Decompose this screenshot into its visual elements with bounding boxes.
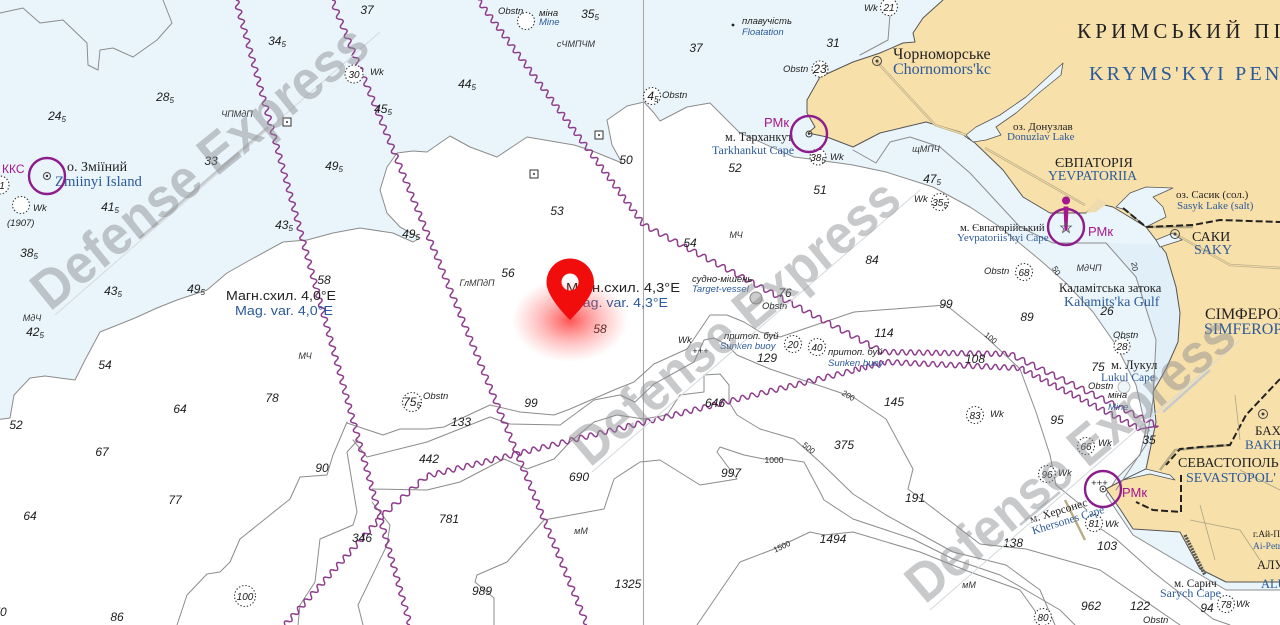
purple radar circle markers: +++	[1091, 478, 1108, 489]
depth soundings: 90	[315, 461, 329, 475]
depth soundings: 76	[778, 286, 792, 300]
depth soundings: 89	[1020, 310, 1034, 324]
depth soundings: 52	[9, 418, 23, 432]
place names: о. Зміїний	[67, 160, 128, 175]
depth soundings: 5	[39, 331, 44, 340]
place names: SAKY	[1194, 243, 1232, 258]
depth soundings: 28	[156, 90, 169, 104]
depth soundings: 35	[581, 7, 594, 21]
dotted obstruction and wreck markers: 35	[932, 198, 943, 209]
place names: Khersones Cape	[1031, 504, 1106, 537]
red location pin	[546, 258, 594, 320]
depth soundings: 50	[619, 153, 633, 167]
seabed type labels: ЧПМдП	[221, 109, 253, 119]
dotted obstruction and wreck markers: Wk	[1098, 438, 1113, 449]
dotted obstruction and wreck markers: 68	[1018, 268, 1030, 279]
depth soundings: 95	[1050, 413, 1064, 427]
dotted obstruction and wreck markers: 28	[1115, 342, 1128, 353]
seabed type labels: сЧМПЧМ	[557, 39, 596, 49]
dotted obstruction and wreck markers: Obstn	[423, 391, 448, 402]
dotted obstruction and wreck markers: +++	[692, 346, 709, 357]
depth soundings: 58	[593, 322, 607, 336]
depth soundings: 442	[419, 452, 439, 466]
depth soundings: 43	[275, 218, 288, 232]
depth soundings: 5	[936, 178, 941, 187]
depth soundings: 191	[905, 491, 925, 505]
meridian line	[642, 0, 644, 625]
chart annotations: плавучість	[742, 16, 792, 27]
contour depth labels: 500	[801, 440, 817, 456]
depth soundings: 138	[1003, 536, 1023, 550]
dotted obstruction and wreck markers: Wk	[1058, 468, 1073, 479]
depth soundings: 5	[471, 83, 476, 92]
chart annotations: притоп. буй	[724, 331, 779, 342]
dotted obstruction and wreck markers: Wk	[33, 203, 48, 214]
depth soundings: 1494	[820, 532, 847, 546]
dotted obstruction and wreck markers: Obstn	[984, 266, 1009, 277]
place names: SEVASTOPOL'	[1186, 471, 1276, 486]
place names: Lukul Cape	[1101, 372, 1155, 384]
place names: Yevpatoriis'kyi Cape	[957, 232, 1049, 244]
seabed type labels: мМ	[962, 580, 976, 590]
depth soundings: 5	[117, 290, 122, 299]
dotted obstruction and wreck markers: 23	[812, 62, 827, 76]
land: Crimean peninsula	[807, 0, 1280, 582]
chart annotations: Sunken buoy	[828, 358, 885, 369]
dotted obstruction and wreck markers: Wk	[990, 409, 1005, 420]
dotted obstruction and wreck markers: 81	[1088, 519, 1100, 530]
depth soundings: 54	[683, 236, 697, 250]
depth soundings: 51	[813, 183, 827, 197]
depth soundings: 58	[317, 273, 331, 287]
place names: Tarkhankut Cape	[712, 143, 794, 157]
chart annotations: Floatation	[742, 27, 784, 38]
depth soundings: 346	[352, 531, 372, 545]
depth soundings: 33	[204, 154, 218, 168]
dotted obstruction and wreck markers: 100	[237, 592, 254, 603]
purple radar circle markers	[2, 115, 1147, 507]
contour depth labels	[765, 261, 1140, 555]
depth soundings: 99	[524, 396, 538, 410]
dotted obstruction and wreck markers: Mine	[1108, 402, 1129, 413]
chart annotations: Sunken buoy	[720, 341, 777, 352]
seabed type labels: МЧ	[729, 230, 744, 240]
magnetic variation label west	[226, 289, 336, 318]
place names: Sasyk Lake (salt)	[1177, 200, 1254, 212]
depth soundings: 99	[939, 297, 953, 311]
seabed type labels: щМПЧ	[912, 144, 941, 154]
place names: САКИ	[1192, 230, 1230, 245]
chart annotations: судно-мішень	[692, 274, 752, 285]
dotted obstruction and wreck markers: 4	[647, 89, 654, 103]
depth soundings: 78	[265, 391, 279, 405]
depth soundings: 1325	[615, 577, 642, 591]
maritime corridor wavy lines	[234, 0, 1160, 625]
seabed type labels: МдЧ	[23, 313, 42, 323]
purple radar circle markers: РМк	[1122, 485, 1147, 500]
depth soundings: 67	[95, 445, 110, 459]
chart annotations: міна	[539, 8, 558, 19]
magnetic variation label west: Магн.схил. 4,0°E	[226, 289, 336, 303]
depth soundings: 64	[23, 509, 37, 523]
chart annotations: Mine	[539, 17, 560, 28]
depth soundings: 5	[200, 288, 205, 297]
dotted obstruction and wreck markers: Wk	[1236, 599, 1251, 610]
place names: м. Лукул	[1111, 358, 1157, 372]
purple radar circle markers: РМк	[1088, 224, 1113, 239]
depth soundings: 26	[1099, 304, 1114, 318]
dotted obstruction and wreck markers: (1907)	[7, 218, 34, 229]
depth soundings: 37	[689, 41, 704, 55]
dotted obstruction and wreck markers: Wk	[914, 194, 929, 205]
place names: Kalamits'ka Gulf	[1064, 295, 1160, 310]
depth soundings: 77	[168, 493, 183, 507]
dotted obstruction and wreck markers: 75	[403, 395, 416, 409]
depth soundings: 94	[1200, 601, 1214, 615]
depth soundings: 108	[965, 352, 985, 366]
Defense Express watermarks: Defense Express	[893, 303, 1247, 614]
place names: СЕВАСТОПОЛЬ	[1178, 456, 1279, 471]
depth soundings: 37	[360, 3, 375, 17]
depth soundings: 5	[33, 252, 38, 261]
dotted obstruction and wreck markers: 5	[416, 401, 421, 410]
place names: м. Сарич	[1174, 578, 1217, 590]
depth soundings: 35	[1142, 433, 1156, 447]
depth soundings: 5	[387, 108, 392, 117]
dotted obstruction and wreck markers: 5	[943, 201, 948, 210]
depth soundings: 43	[104, 284, 117, 298]
dotted obstruction and wreck markers: Obstn	[662, 90, 687, 101]
dotted obstruction and wreck markers: Wk	[370, 67, 385, 78]
depth soundings: 103	[1097, 539, 1117, 553]
contour depth labels: 20	[1129, 261, 1140, 272]
red location glow	[512, 278, 628, 362]
depth soundings: 989	[472, 584, 492, 598]
town markers	[872, 56, 1268, 418]
depth soundings: 86	[110, 610, 124, 624]
depth soundings: 5	[338, 165, 343, 174]
depth soundings: 84	[865, 253, 879, 267]
dotted obstruction and wreck markers: міна	[1108, 390, 1127, 401]
magnetic variation label east	[566, 281, 680, 310]
depth soundings: 997	[721, 466, 742, 480]
magnetic variation label east: Mag. var. 4,3°E	[571, 296, 668, 310]
place names: Chornomors'kc	[893, 61, 991, 78]
depth soundings: 44	[458, 77, 471, 91]
depth soundings: 38	[20, 246, 33, 260]
contour depth labels: 1000	[765, 455, 784, 465]
inner bay tint	[1106, 243, 1190, 460]
place names: м. Херсонес	[1028, 497, 1089, 526]
depth soundings: 129	[757, 351, 777, 365]
depth soundings: 47	[923, 172, 936, 186]
depth soundings: 5	[61, 115, 66, 124]
depth soundings: 45	[374, 102, 387, 116]
depth soundings: 41	[101, 200, 114, 214]
seabed type labels: ГлМПдП	[459, 278, 495, 288]
contour depth labels: 200	[840, 389, 857, 403]
dotted obstruction and wreck markers: Obstn	[783, 64, 808, 75]
depth soundings: 133	[451, 415, 471, 429]
magnetic variation label west: Mag. var. 4,0°E	[235, 304, 333, 318]
seabed type labels: МЧ	[298, 351, 313, 361]
seabed type labels: МдЧП	[1076, 263, 1102, 273]
dotted obstruction and wreck markers: 38	[810, 153, 821, 164]
depth soundings: 646	[705, 396, 725, 410]
contour depth labels: 100	[983, 330, 999, 346]
depth soundings: 781	[439, 512, 459, 526]
purple radar circle markers: ККС	[2, 162, 25, 176]
place names: м. Тарханкут	[725, 130, 793, 144]
dotted obstruction and wreck markers: 5	[821, 156, 826, 165]
place names: Каламітська затока	[1059, 281, 1162, 295]
dotted obstruction and wreck markers: 80	[1037, 613, 1049, 624]
chart annotations: притоп. буй	[828, 347, 883, 358]
contour depth labels: 1500	[772, 539, 792, 555]
place names: ЄВПАТОРІЯ	[1055, 156, 1133, 171]
depth soundings: 5	[281, 40, 286, 49]
dotted obstruction and wreck markers: 66	[1080, 442, 1092, 453]
dotted obstruction and wreck markers: 83	[969, 411, 981, 422]
chart annotations: Target-vessel	[692, 284, 750, 295]
magnetic variation label east: Магн.схил. 4,3°E	[566, 281, 680, 295]
dotted obstruction and wreck markers: 40	[811, 343, 823, 354]
depth soundings: 56	[501, 266, 515, 280]
dotted obstruction and wreck markers: 78	[1220, 600, 1232, 611]
depth soundings: 5	[169, 96, 174, 105]
dotted obstruction and wreck markers: Wk	[678, 335, 693, 346]
lakes and bays	[966, 63, 1182, 480]
depth soundings: 962	[1081, 599, 1101, 613]
place names: YEVPATORIIA	[1048, 168, 1137, 183]
dotted obstruction and wreck markers: 20	[786, 340, 799, 351]
Defense Express watermarks: Defense Express	[19, 12, 380, 321]
depth soundings: 5	[114, 206, 119, 215]
place names: оз. Сасик (сол.)	[1176, 189, 1249, 201]
dotted obstruction and wreck markers: 30	[348, 70, 360, 81]
dotted obstruction and wreck markers: 21	[882, 3, 895, 14]
place names: Чорноморське	[893, 46, 991, 63]
Defense Express watermarks: Defense Express	[558, 166, 912, 477]
dotted obstruction and wreck markers: 5	[654, 95, 659, 104]
depth soundings: 34	[268, 34, 281, 48]
depth soundings: 114	[874, 326, 894, 340]
roads and railways on land	[877, 62, 1280, 575]
dotted obstruction and wreck markers: Wk	[864, 3, 879, 14]
purple radar circle markers: РМк	[764, 115, 789, 130]
dotted obstruction and wreck markers: Wk	[1105, 519, 1120, 530]
depth soundings: 5	[288, 224, 293, 233]
chart annotations	[539, 8, 885, 369]
depth soundings: 49	[402, 227, 415, 241]
dotted obstruction and wreck markers: Obstn	[498, 6, 523, 17]
depth soundings: 690	[569, 470, 589, 484]
place names: м. Євпаторійський	[960, 222, 1045, 234]
place names: Donuzlav Lake	[1007, 131, 1075, 143]
depth soundings: 145	[884, 395, 904, 409]
depth soundings: 49	[325, 159, 338, 173]
square beacon markers	[283, 118, 603, 178]
depth soundings: 54	[98, 358, 112, 372]
depth soundings: 5	[594, 13, 599, 22]
place names: Sarych Cape	[1160, 586, 1221, 600]
depth soundings: 122	[1130, 599, 1150, 613]
depth soundings: 52	[728, 161, 742, 175]
dotted obstruction and wreck markers: Obstn	[1088, 381, 1113, 392]
depth soundings: 5	[415, 233, 420, 242]
depth soundings: 375	[834, 438, 854, 452]
place names: оз. Донузлав	[1013, 121, 1073, 133]
dotted obstruction and wreck markers: 96	[1041, 470, 1053, 481]
dotted obstruction and wreck markers: Wk	[830, 152, 845, 163]
depth soundings: 64	[173, 402, 187, 416]
seabed type labels: мМ	[574, 526, 588, 536]
depth soundings: 75	[1091, 360, 1105, 374]
dotted obstruction and wreck markers: Obstn	[762, 301, 787, 312]
dotted obstruction and wreck markers: Obstn	[1113, 330, 1138, 341]
depth soundings: 24	[48, 109, 61, 123]
depth soundings: 42	[26, 325, 39, 339]
depth soundings: 31	[826, 36, 840, 50]
contour depth labels: 50	[1050, 265, 1063, 277]
depth soundings: 49	[187, 282, 200, 296]
depth soundings: 53	[550, 204, 564, 218]
place names: Zmiinyi Island	[55, 174, 143, 190]
seabed type labels	[23, 39, 1102, 590]
